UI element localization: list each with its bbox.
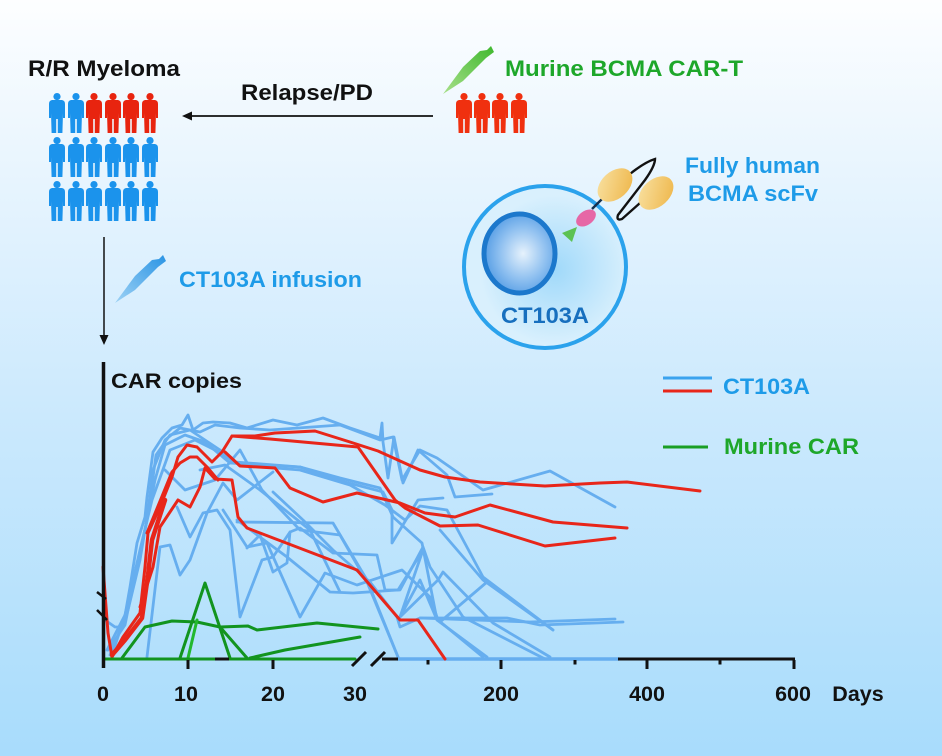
label: CT103A infusion: CT103A infusion <box>179 267 362 292</box>
x axis labels: 10 <box>174 682 198 706</box>
y axis <box>102 362 105 668</box>
legend: CT103A: CT103A <box>723 374 810 399</box>
x axis labels: 20 <box>261 682 285 706</box>
x axis line <box>215 658 795 660</box>
x axis labels: 0 <box>97 682 109 706</box>
x axis labels: Days <box>832 682 884 706</box>
y axis break marks <box>97 592 107 620</box>
label: Relapse/PD: Relapse/PD <box>241 80 373 105</box>
legend <box>663 374 859 459</box>
x axis ticks <box>188 660 794 669</box>
heading: R/R Myeloma: R/R Myeloma <box>28 56 181 81</box>
y-axis title: CAR copies: CAR copies <box>111 370 242 393</box>
arrow: myeloma to infusion chart <box>100 237 108 345</box>
cell label: CT103A <box>501 303 589 328</box>
CT103A blue patient lines <box>105 415 623 659</box>
legend: Murine CAR: Murine CAR <box>724 434 859 459</box>
axes <box>97 362 795 669</box>
CT103A red patient lines <box>103 431 700 659</box>
Murine CAR green patient lines <box>122 583 378 658</box>
arrow: relapse to myeloma <box>182 112 433 120</box>
cell membrane <box>464 186 626 348</box>
CAR receptor: linker and scFv domains <box>562 159 680 242</box>
label: Fully human BCMA scFv <box>685 153 820 206</box>
icon: green syringe <box>443 46 494 94</box>
x axis labels: 200 <box>483 682 519 706</box>
icon: blue syringe <box>115 255 166 303</box>
label: Fully human BCMA scFv: BCMA scFv <box>688 181 819 206</box>
x axis labels: 400 <box>629 682 665 706</box>
blue baseline segment <box>398 657 618 661</box>
nucleus <box>484 214 555 293</box>
label: Fully human BCMA scFv: Fully human <box>685 153 820 178</box>
icon group: myeloma patients <box>49 93 158 221</box>
diagram: CT103A cell <box>464 159 680 348</box>
x axis labels: 30 <box>343 682 367 706</box>
x axis labels: 600 <box>775 682 811 706</box>
line chart: CAR copies over time <box>103 415 700 659</box>
icon group: murine treated patients <box>456 93 527 133</box>
x axis break marks <box>352 652 385 666</box>
x axis labels <box>97 682 884 706</box>
heading: Murine BCMA CAR-T: Murine BCMA CAR-T <box>505 56 744 81</box>
